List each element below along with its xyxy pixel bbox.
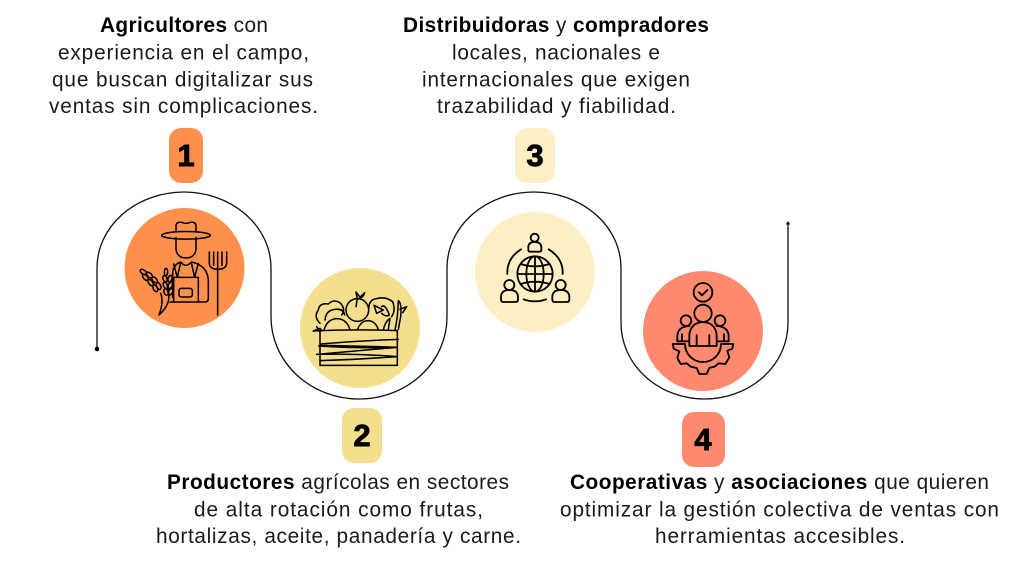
text block 3: distribuidoras: locales, nacionales e: [452, 42, 660, 64]
badge 3: 3: [526, 138, 544, 173]
text block 3: distribuidoras: internacionales que exigen: [422, 68, 690, 92]
icon: farmer with wheat and pitchfork: [139, 222, 227, 315]
text block 2: productores: hortalizas, aceite, panadería y carne.: [156, 525, 521, 548]
badge 1: [169, 128, 203, 183]
text block 1: agricultores: experiencia en el campo,: [58, 42, 309, 64]
icon: globe with people: [501, 234, 569, 302]
text block 1: agricultores: ventas sin complicaciones.: [49, 95, 318, 118]
text block 2: productores: de alta rotación como frutas,: [194, 498, 483, 522]
circle 2: productores: [300, 268, 420, 388]
text block 3: distribuidoras: Distribuidoras y compradores: [403, 14, 709, 37]
text block 2: productores: [156, 471, 521, 548]
text block 1: agricultores: Agricultores con: [100, 14, 268, 37]
text block 4: cooperativas: optimizar la gestión colectiva de ventas con: [560, 498, 999, 522]
text block 1: agricultores: que buscan digitalizar sus: [52, 68, 313, 92]
icon: vegetable crate: [313, 292, 407, 365]
text block 1: agricultores: [49, 14, 318, 118]
text block 4: cooperativas: [560, 471, 999, 548]
badge 4: 4: [694, 422, 712, 457]
text block 3: distribuidoras: [403, 14, 709, 118]
circle 4: cooperativas: [643, 271, 763, 391]
winding path line: [95, 192, 790, 399]
text block 2: productores: Productores agrícolas en sectores: [167, 471, 509, 494]
text block 4: cooperativas: Cooperativas y asociaciones que quieren: [570, 471, 989, 494]
circle 3: distribuidoras: [475, 212, 595, 332]
circle 1: agricultores: [124, 208, 244, 328]
badge 3: [515, 128, 555, 183]
badge 2: 2: [353, 418, 371, 453]
icon: team with gear and check: [673, 283, 733, 374]
badge 2: [342, 408, 382, 463]
text block 3: distribuidoras: trazabilidad y fiabilidad.: [437, 95, 676, 118]
badge 1: 1: [177, 138, 195, 173]
badge 4: [682, 412, 725, 467]
text block 4: cooperativas: herramientas accesibles.: [655, 525, 905, 548]
